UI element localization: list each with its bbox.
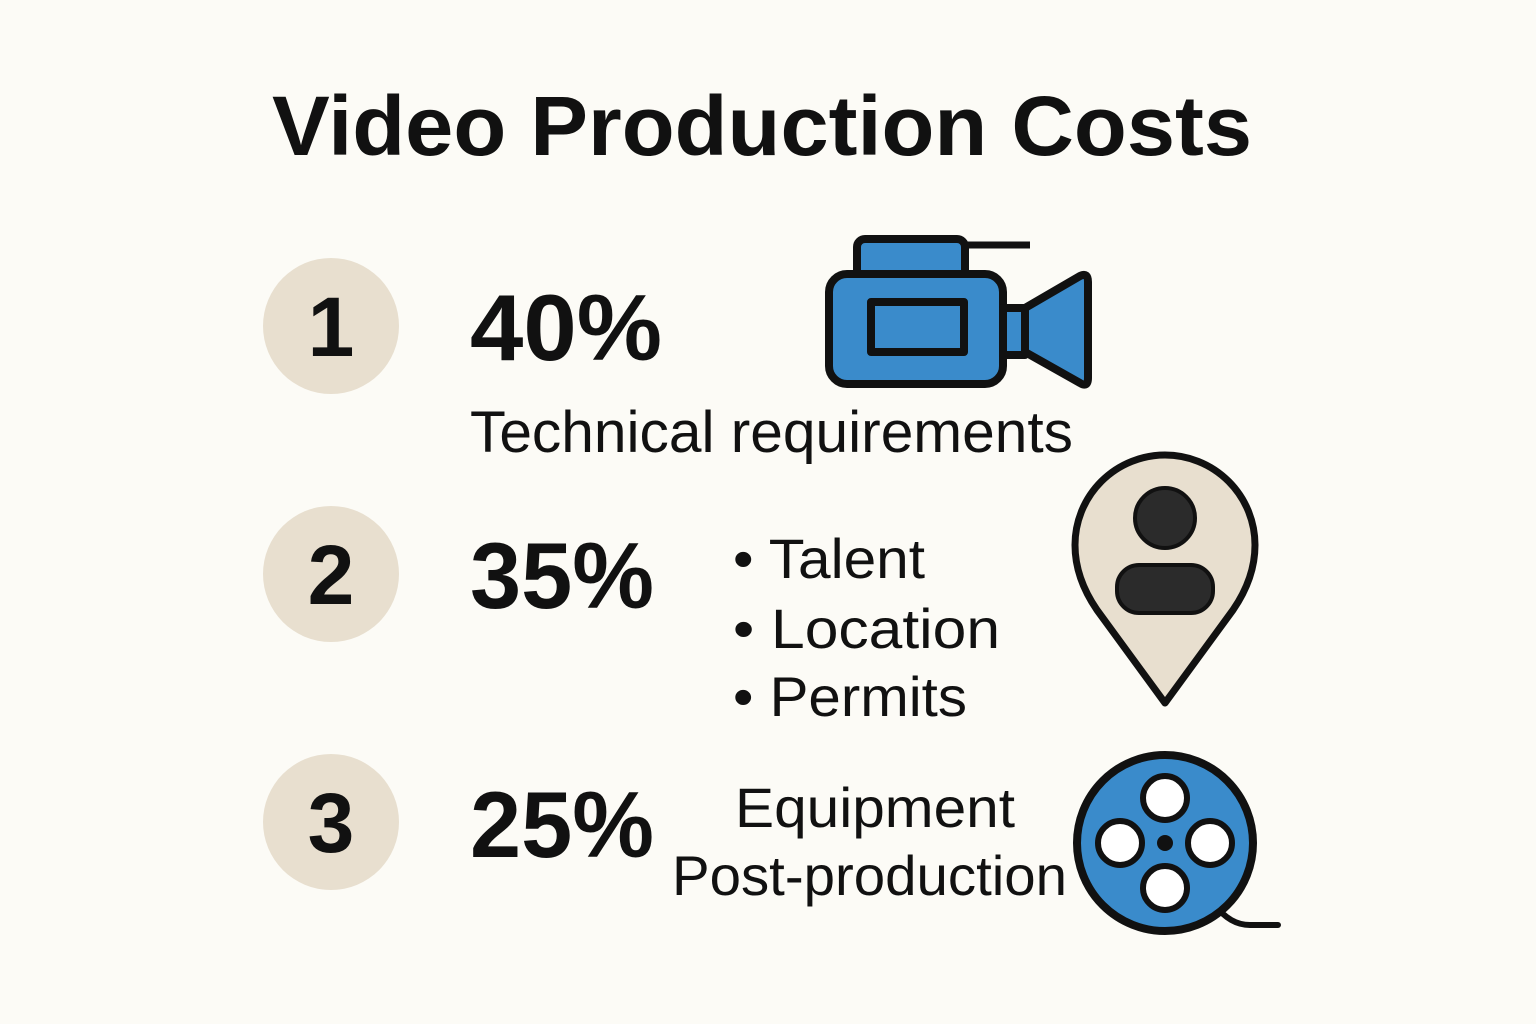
number badge 3 [263, 754, 399, 890]
label: equipment / post-production: Equipment [735, 776, 1015, 839]
label: equipment / post-production [672, 776, 1067, 907]
icon: location pin with person [1075, 455, 1255, 703]
row 2: talent, location, permits [263, 455, 1255, 728]
number badge 1 [263, 258, 399, 394]
row 3: equipment, post-production [263, 754, 1278, 931]
bullet list: • Talent [733, 527, 925, 590]
percent 40%: 40% [470, 275, 662, 380]
number badge 2 [263, 506, 399, 642]
percent 35%: 35% [470, 523, 654, 628]
icon: video camera [829, 239, 1088, 385]
bullet list [733, 527, 1000, 728]
title: Video Production Costs [272, 79, 1252, 173]
number badge 3: 3 [308, 776, 354, 870]
percent 25%: 25% [470, 772, 654, 877]
number badge 1: 1 [308, 280, 354, 374]
number badge 2: 2 [308, 528, 354, 622]
bullet list: • Permits [733, 665, 967, 728]
icon: film reel [1077, 755, 1278, 931]
row 1: technical requirements [263, 239, 1088, 465]
label: equipment / post-production: Post-production [672, 844, 1067, 907]
bullet list: • Location [733, 597, 1000, 660]
label: technical requirements: Technical requirements [470, 400, 1073, 465]
